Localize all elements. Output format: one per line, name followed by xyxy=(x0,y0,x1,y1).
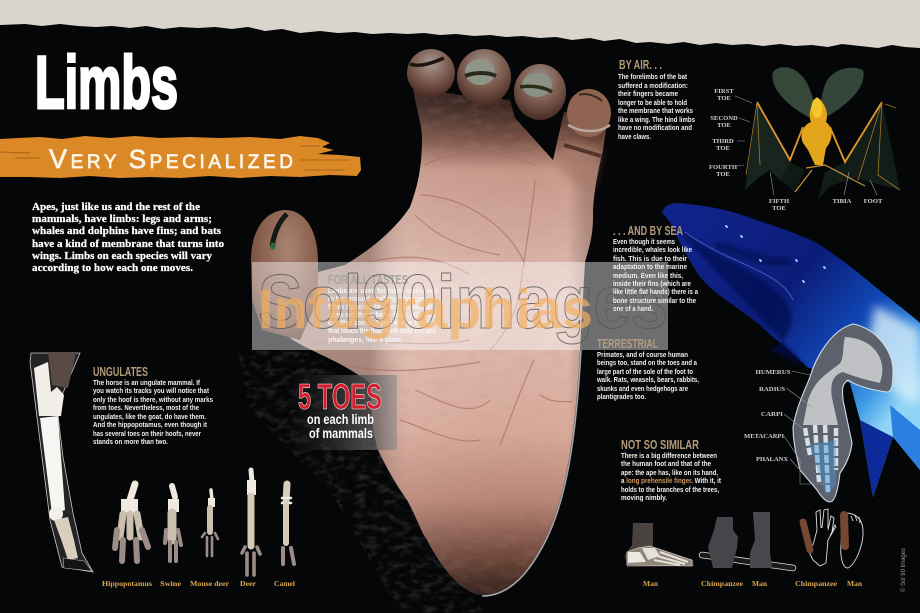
bat labels: TOE xyxy=(772,205,787,212)
panel: ungulates: stands on more than two. xyxy=(93,437,168,446)
bat labels: FIFTH xyxy=(769,198,790,205)
icon: chimpanzee hand outline xyxy=(803,509,836,566)
panel: for all tastes: step on the whole foot, others xyxy=(328,310,434,319)
illustration: blue whale xyxy=(662,203,920,497)
panel: terrestrial: TERRESTRIAL xyxy=(597,337,658,351)
bat labels: FOOT xyxy=(864,198,883,205)
icon: swine limb bones xyxy=(165,486,181,561)
panel: by air: suffered a modification: xyxy=(618,81,688,90)
toe 4 xyxy=(564,89,611,156)
comparison labels: Man xyxy=(847,579,862,588)
ungulate labels: Mouse deer xyxy=(190,579,230,588)
panel: ungulates: you watch its tracks you will notice that xyxy=(93,386,209,395)
panel: terrestrial: walk. Rats, weasels, bears, rabbits, xyxy=(596,375,699,384)
panel: and by sea: bone structure similar to the xyxy=(613,296,696,305)
panel: terrestrial: skunks and even hedgehogs are xyxy=(597,384,688,393)
fin labels: CARPI xyxy=(761,411,783,418)
x-ray of whale fin xyxy=(793,324,893,502)
intro paragraph: wings. Limbs on each species will vary xyxy=(32,251,213,262)
copyright: © Sol 90 Images xyxy=(899,547,907,592)
panel: by air: have no modification and xyxy=(618,123,692,132)
panel: not so similar: ape: the ape has, like on its hand, xyxy=(621,468,718,477)
panel: ungulates: has several toes on their hoofs, never xyxy=(93,429,201,438)
panel: for all tastes: phalanges, like a plate. xyxy=(328,335,403,344)
panel: ungulates: The horse is an ungulate mammal. If xyxy=(93,378,200,387)
panel: and by sea: medium. Even like this, xyxy=(613,271,683,280)
comparison labels: Chimpanzee xyxy=(795,579,838,588)
panel: not so similar: moving nimbly. xyxy=(621,493,667,502)
bat labels: TOE xyxy=(716,171,731,178)
panel: and by sea: Even though it seems xyxy=(613,237,675,246)
panel: ungulates: from toes. Nevertheless, most of the xyxy=(93,403,199,412)
panel: by air: the membrane that works xyxy=(618,106,693,115)
bat labels xyxy=(709,88,883,212)
fin labels: HUMERUS xyxy=(756,369,791,376)
comparison labels: Chimpanzee xyxy=(701,579,744,588)
ungulate labels xyxy=(102,579,295,588)
callout: 5 toes: on each limb xyxy=(307,411,374,427)
palm creases xyxy=(310,154,572,445)
intro paragraph: mammals, have limbs: legs and arms; xyxy=(32,214,212,225)
toe shaft warm light xyxy=(560,140,600,190)
panel: by air: The forelimbs of the bat xyxy=(618,72,687,81)
bat labels: FIRST xyxy=(714,88,734,95)
panel: for all tastes: in the ground, walking changes xyxy=(328,294,426,303)
panel: not so similar: a long prehensile finger. With it, it xyxy=(621,476,721,485)
intro paragraph: have a kind of membrane that turns into xyxy=(32,239,224,250)
sole side shading xyxy=(290,87,608,595)
panel: and by sea: like little flat hands) there is a xyxy=(613,287,699,296)
intro paragraph: according to how each one moves. xyxy=(32,263,193,274)
panel: and by sea: inside their fins (which are xyxy=(613,279,691,288)
fin labels: METACARPI xyxy=(744,433,784,440)
comparison labels: Man xyxy=(752,579,767,588)
bat labels: TOE xyxy=(716,145,731,152)
panel: not so similar: There is a big difference between xyxy=(621,451,717,460)
panel: for all tastes: FOR ALL TASTES xyxy=(328,272,408,287)
ungulate labels: Camel xyxy=(274,579,295,588)
watermark band xyxy=(252,260,668,350)
torn top paper band xyxy=(0,0,920,48)
panel: terrestrial: plantigrades too. xyxy=(597,392,646,401)
sole and palm of the foot xyxy=(290,87,608,595)
panel: by air: like a wing. The hind limbs xyxy=(618,115,695,124)
bat labels: THIRD xyxy=(712,138,734,145)
watermark outline text: Sol90images xyxy=(258,260,668,345)
callout: 5 toes: 5 TOES xyxy=(298,376,382,417)
panel: not so similar: holds to the branches of the trees, xyxy=(621,485,719,494)
toe 1 xyxy=(407,49,455,97)
panel: by air xyxy=(618,58,695,141)
bat labels: TIBIA xyxy=(833,198,852,205)
panel: by air: have claws. xyxy=(618,132,651,141)
main photo: ape foot xyxy=(251,49,611,596)
bat labels: FOURTH xyxy=(709,164,738,171)
rim light on the heel xyxy=(482,350,581,596)
panel: for all tastes: on the toes. There are those xyxy=(328,318,436,327)
callout: 5 toes: of mammals xyxy=(309,425,373,441)
panel: ungulates: only the hoof is there, without any marks xyxy=(93,395,213,404)
panel: and by sea: adaptation to the marine xyxy=(613,262,687,271)
comparison labels: Man xyxy=(643,579,658,588)
bat labels: TOE xyxy=(717,95,732,102)
comparison labels xyxy=(643,579,862,588)
panel: terrestrial xyxy=(596,337,699,401)
fin labels xyxy=(744,369,826,484)
subtitle: VERY SPECIALIZED xyxy=(49,144,293,174)
panel: by air: BY AIR. . . xyxy=(619,58,662,72)
panel: by air: their fingers became xyxy=(618,89,678,98)
callout: 5 toes xyxy=(292,375,397,450)
panel: not so similar xyxy=(621,438,721,502)
intro paragraph: Apes, just like us and the rest of the xyxy=(32,202,200,213)
intro paragraph xyxy=(32,202,224,274)
panel: and by sea: one of a hand. xyxy=(613,304,653,313)
panel: terrestrial: large part of the sole of the foot to xyxy=(597,367,693,376)
icon: camel limb bones xyxy=(282,484,294,564)
icon: mouse deer limb bones xyxy=(202,490,218,556)
panel: and by sea: fish. This is due to their xyxy=(613,254,687,263)
icon: human foot skeleton xyxy=(625,523,694,567)
panel: ungulates xyxy=(93,365,213,446)
panel: for all tastes: from species to species. Some xyxy=(328,302,432,311)
fin labels: PHALANX xyxy=(756,456,788,463)
panel: terrestrial: Primates, and of course human xyxy=(597,350,688,359)
panel: not so similar: the human foot and that of the xyxy=(621,459,711,468)
panel: ungulates: And the hippopotamus, even though it xyxy=(93,420,207,429)
panel: and by sea xyxy=(613,224,699,313)
panel: by air: longer to be able to hold xyxy=(618,98,687,107)
icon: hippopotamus limb bones xyxy=(115,484,148,561)
panel: and by sea: . . . AND BY SEA xyxy=(613,224,683,238)
icon: x-ray bat xyxy=(745,67,900,200)
ungulate labels: Deer xyxy=(240,579,257,588)
icon: human foot outline xyxy=(841,513,863,568)
panel: for all tastes: that touch the floor with only the last xyxy=(328,326,436,335)
intro paragraph: whales and dolphins have fins; and bats xyxy=(32,226,221,237)
orange brush band xyxy=(0,136,361,178)
panel: ungulates: UNGULATES xyxy=(93,365,148,379)
panel: and by sea: incredible, whales look like xyxy=(613,245,692,254)
hair on the arm behind the foot xyxy=(238,350,485,613)
skin wrinkles xyxy=(290,87,608,595)
panel: terrestrial: beings too, stand on the toes and a xyxy=(597,358,698,367)
bat labels: TOE xyxy=(717,122,732,129)
icon: chimpanzee and human gripping a bar xyxy=(702,512,793,568)
big toe at left xyxy=(251,210,318,340)
bat labels: SECOND xyxy=(710,115,738,122)
ungulate labels: Hippopotamus xyxy=(102,579,152,588)
watermark orange text: Infographias xyxy=(258,277,593,340)
toe 3 xyxy=(514,64,566,120)
panel: ungulates: ungulates, like the goat, do have them. xyxy=(93,412,206,421)
toe 2 xyxy=(457,49,511,105)
ungulate labels: Swine xyxy=(160,579,182,588)
title: Limbs xyxy=(35,41,178,124)
fin labels: RADIUS xyxy=(759,386,785,393)
panel: not so similar: NOT SO SIMILAR xyxy=(621,438,699,452)
icon: horse leg skeleton xyxy=(30,353,93,572)
panel: for all tastes xyxy=(328,272,438,344)
panel: for all tastes: Limbs are used for many tasks, and xyxy=(328,286,438,295)
icon: deer limb bones xyxy=(242,470,260,575)
